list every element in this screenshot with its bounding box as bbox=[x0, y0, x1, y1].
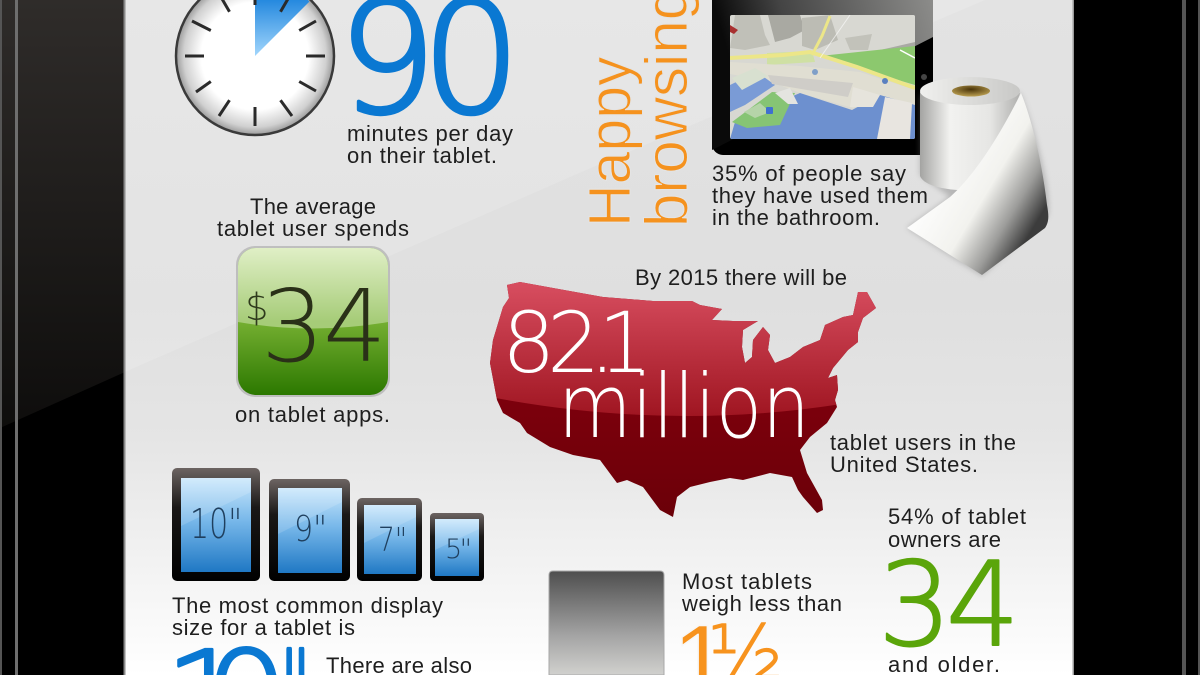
home button bbox=[921, 74, 927, 80]
text: By 2015: By 2015 there will be bbox=[635, 265, 847, 290]
screen background bbox=[125, 0, 1073, 675]
big number 1 and a half bbox=[672, 604, 784, 675]
text: tablet users in US: United States. bbox=[830, 452, 978, 477]
text: 35% bathroom: 35% of people say bbox=[712, 161, 906, 186]
text: 54% of tablet owners are: owners are bbox=[888, 527, 1001, 552]
7 inch tablet bbox=[357, 498, 422, 581]
text: 35% bathroom bbox=[712, 161, 928, 230]
text: average tablet user spends: tablet user spends bbox=[217, 216, 409, 241]
9 inch tablet: 9" bbox=[294, 509, 327, 550]
big number 82.1: 82.1 bbox=[502, 294, 651, 392]
text: 35% bathroom: they have used them bbox=[712, 183, 928, 208]
text: on tablet apps: on tablet apps. bbox=[235, 402, 390, 427]
icon: green app tile with $34: $ bbox=[245, 286, 269, 329]
5 inch tablet bbox=[430, 513, 484, 581]
big word million: million bbox=[558, 355, 810, 458]
heading: Happy browsing: Happy bbox=[577, 56, 643, 227]
5 inch tablet: 5" bbox=[445, 534, 472, 565]
text: most tablets weigh less than: weigh less than bbox=[681, 591, 842, 616]
text: most tablets weigh less than bbox=[681, 569, 842, 616]
icon: toilet paper roll bbox=[907, 77, 1049, 276]
text: most common display size: The most common display bbox=[172, 593, 443, 618]
icon: tablet size comparison bbox=[172, 468, 484, 581]
text: most common display size bbox=[172, 593, 443, 640]
text: average tablet user spends bbox=[217, 194, 409, 241]
text: minutes per day: minutes per day bbox=[347, 121, 513, 146]
text: 35% bathroom: in the bathroom. bbox=[712, 205, 880, 230]
text: average tablet user spends: The average bbox=[250, 194, 376, 219]
icon: stopwatch clock bbox=[176, 0, 334, 135]
text: 54% of tablet owners are: 54% of tablet bbox=[888, 504, 1026, 529]
text: most common display size: size for a tablet is bbox=[172, 615, 355, 640]
10 inch tablet: 10" bbox=[190, 500, 242, 548]
7 inch tablet: 7" bbox=[378, 520, 407, 559]
big green number 34: 34 bbox=[878, 538, 1020, 673]
text: minutes per day bbox=[347, 121, 513, 168]
left device bezel bbox=[0, 0, 126, 675]
map screen bbox=[730, 15, 915, 139]
icon: grey tablet weight bbox=[549, 571, 664, 675]
icon: green app tile with $34: 34 bbox=[261, 268, 387, 385]
right device bezel bbox=[1072, 0, 1200, 675]
9 inch tablet bbox=[269, 479, 350, 581]
10 inch tablet bbox=[172, 468, 260, 581]
text: 54% of tablet owners are bbox=[888, 504, 1026, 552]
text: most tablets weigh less than: Most tablets bbox=[682, 569, 812, 594]
icon: tablet showing a map bbox=[712, 0, 933, 155]
heading: Happy browsing bbox=[577, 0, 700, 227]
text: tablet users in US bbox=[830, 430, 1016, 477]
text: tablet users in US: tablet users in the bbox=[830, 430, 1016, 455]
text: minutes per day: on their tablet. bbox=[347, 143, 497, 168]
map of the United States bbox=[490, 282, 876, 517]
icon: green app tile with $34 bbox=[236, 246, 390, 397]
screen gloss reflection bbox=[125, 0, 985, 372]
